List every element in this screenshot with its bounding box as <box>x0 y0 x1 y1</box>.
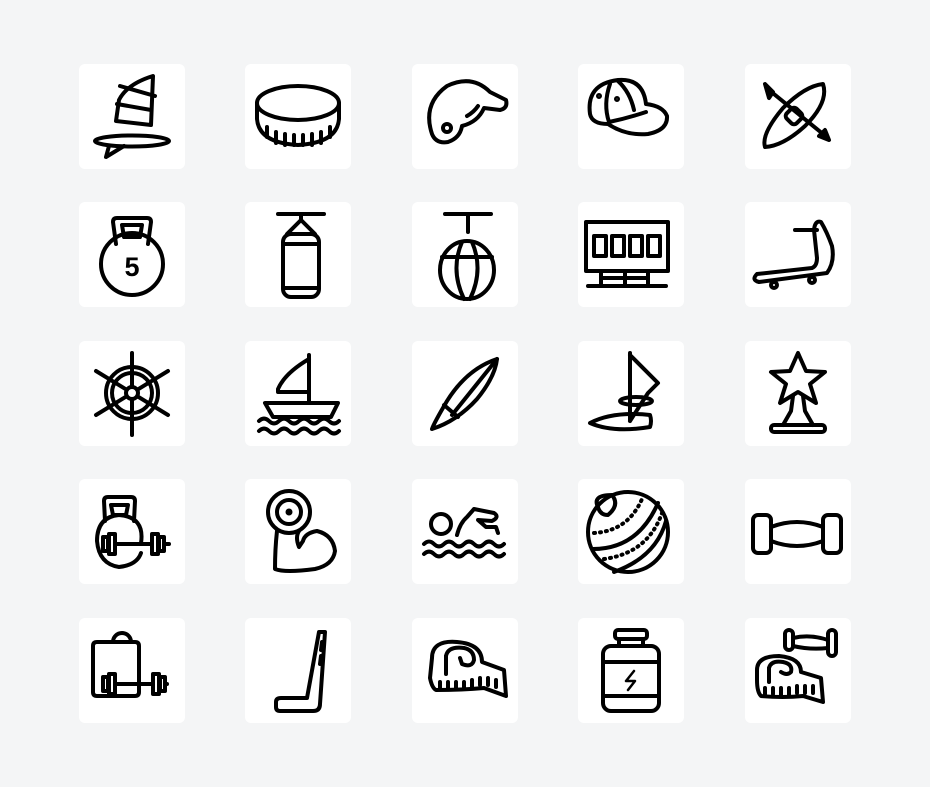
icon: punching bag <box>245 202 351 307</box>
icon: kettlebell 5 <box>79 202 185 307</box>
icon: ship wheel <box>79 341 185 446</box>
icon: batting helmet <box>412 64 518 169</box>
icon: speed bag <box>412 202 518 307</box>
icon: windsurf <box>578 341 684 446</box>
icon: kettlebell and barbell <box>79 479 185 584</box>
icon: baseball cap <box>578 64 684 169</box>
icon: exercise ball <box>578 479 684 584</box>
icon: measuring tape and dumbbell <box>745 618 851 723</box>
icon: arm with weight <box>245 479 351 584</box>
icon: sailboat <box>245 341 351 446</box>
icon: kettlebell 5: 5 <box>124 252 140 282</box>
icon: windsurf board <box>79 64 185 169</box>
icon: dumbbell <box>745 479 851 584</box>
icon: trophy star <box>745 341 851 446</box>
icon: scoreboard <box>578 202 684 307</box>
icon: hockey puck <box>245 64 351 169</box>
icon: treadmill <box>745 202 851 307</box>
icon: swimmer <box>412 479 518 584</box>
icon: kayak <box>745 64 851 169</box>
icon: supplement jar <box>578 618 684 723</box>
icon: hockey stick <box>245 618 351 723</box>
icon: measuring tape <box>412 618 518 723</box>
icon: scale and barbell <box>79 618 185 723</box>
icon: surfboard <box>412 341 518 446</box>
